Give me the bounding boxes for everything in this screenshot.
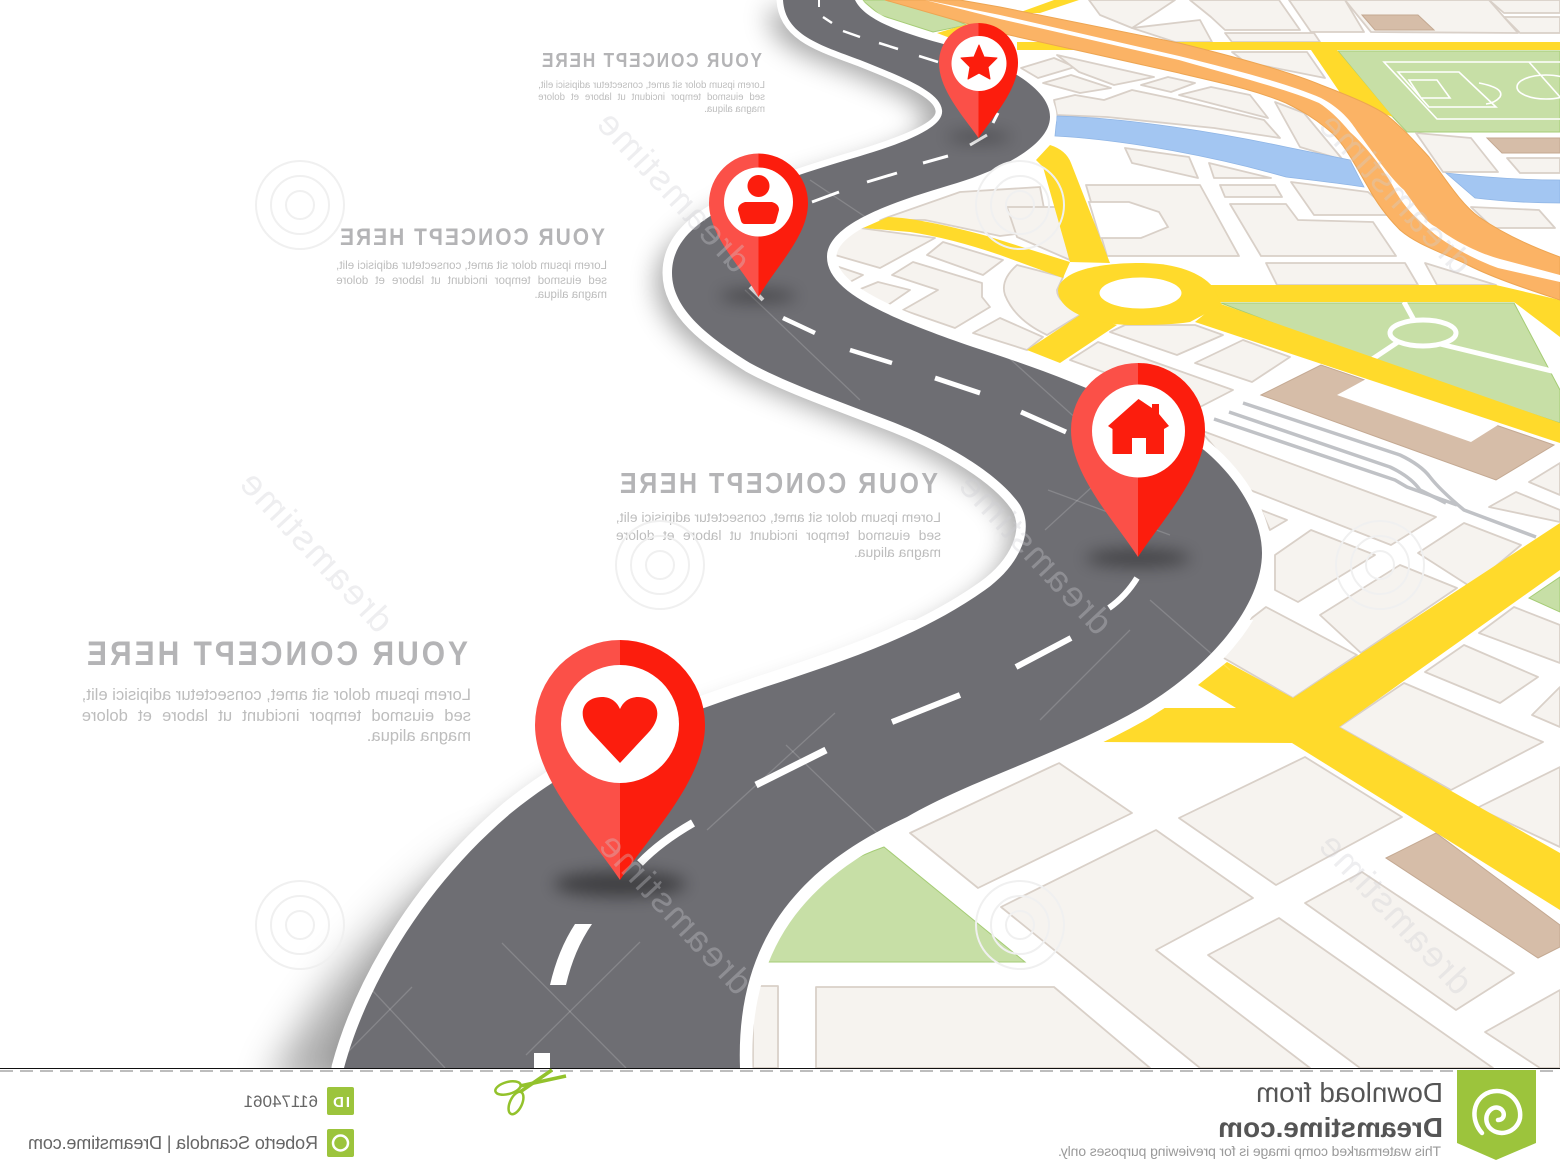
river [1055,116,1560,203]
download text: Download from [1256,1077,1443,1108]
body: Lorem ipsum dolor sit amet, consectetur adipisici elit, [82,685,471,704]
watermark words: dreamstime [591,825,761,1002]
image id [244,1087,354,1115]
pin: heart [535,640,705,880]
icon: star [961,45,997,79]
body [82,685,471,745]
heading: YOUR CONCEPT HERE [542,49,762,71]
icon: heart [583,697,657,763]
railway [1214,403,1536,537]
text block: concept 2 [616,467,941,560]
green areas [755,0,1560,962]
body: magna aliqua. [367,726,471,745]
body: Lorem ipsum dolor sit amet, consectetur adipisici elit, [616,509,941,525]
body: sed eiusmod tempor incidunt ut labore et dolore [538,92,765,103]
body: sed eiusmod tempor incidunt ut labore et dolore [336,275,607,287]
icon: spiral [1474,1091,1520,1133]
icon: person [738,175,779,224]
orange highway [885,0,1560,300]
body: magna aliqua. [534,289,607,301]
heading: YOUR CONCEPT HERE [87,634,468,672]
download text: This watermarked comp image is for previewing purposes only. [1058,1143,1441,1159]
download text: Dreamstime.com [1218,1112,1443,1143]
watermark spirals [256,161,1424,969]
watermark words [232,103,1481,1002]
city map [753,0,1560,1068]
yellow main roads [863,0,1560,910]
heading: YOUR CONCEPT HERE [340,224,605,250]
heading: YOUR CONCEPT HERE [620,467,938,499]
winding road [344,0,1262,1068]
pin: star [939,23,1018,138]
body [336,260,607,301]
body: magna aliqua. [704,104,765,115]
soccer field lines [1384,62,1560,119]
text block: concept 1 [82,634,471,745]
text block: concept 3 [336,224,607,301]
image id: ID [333,1094,350,1111]
body: sed eiusmod tempor incidunt ut labore et dolore [616,527,941,543]
watermark words: dreamstime [951,465,1121,642]
author credit [28,1129,354,1157]
body [616,509,941,560]
pin shadows [554,132,1190,897]
body: Lorem ipsum dolor sit amet, consectetur adipisici elit, [336,260,607,272]
watermark words: dreamstime [1311,105,1481,282]
watermark words: dreamstime [589,103,759,280]
park paths [1371,302,1560,373]
watermark words: dreamstime [232,463,402,640]
body: Lorem ipsum dolor sit amet, consectetur adipisici elit, [538,80,765,91]
icon: house [1108,399,1169,454]
pin: person [709,154,808,297]
author credit: Roberto Scandola | Dreamstime.com [28,1133,318,1153]
image id: 61174061 [244,1092,318,1111]
pin: house [1071,363,1205,557]
body: magna aliqua. [854,544,941,560]
road centre dashes [542,0,1137,1068]
tan buildings [1261,15,1560,958]
road border [344,0,1262,1068]
text block: concept 4 [538,49,765,115]
body [538,80,765,115]
watermark words: dreamstime [1311,825,1481,1002]
road drop shadow [257,0,1016,1068]
city blocks [753,0,1560,1068]
body: sed eiusmod tempor incidunt ut labore et dolore [82,706,471,725]
download text [1058,1077,1443,1159]
footer strip [0,1068,1560,1176]
watermark cross lines [340,180,1230,1068]
ribbon badge [1457,1070,1536,1160]
icon: scissors [494,1070,566,1116]
